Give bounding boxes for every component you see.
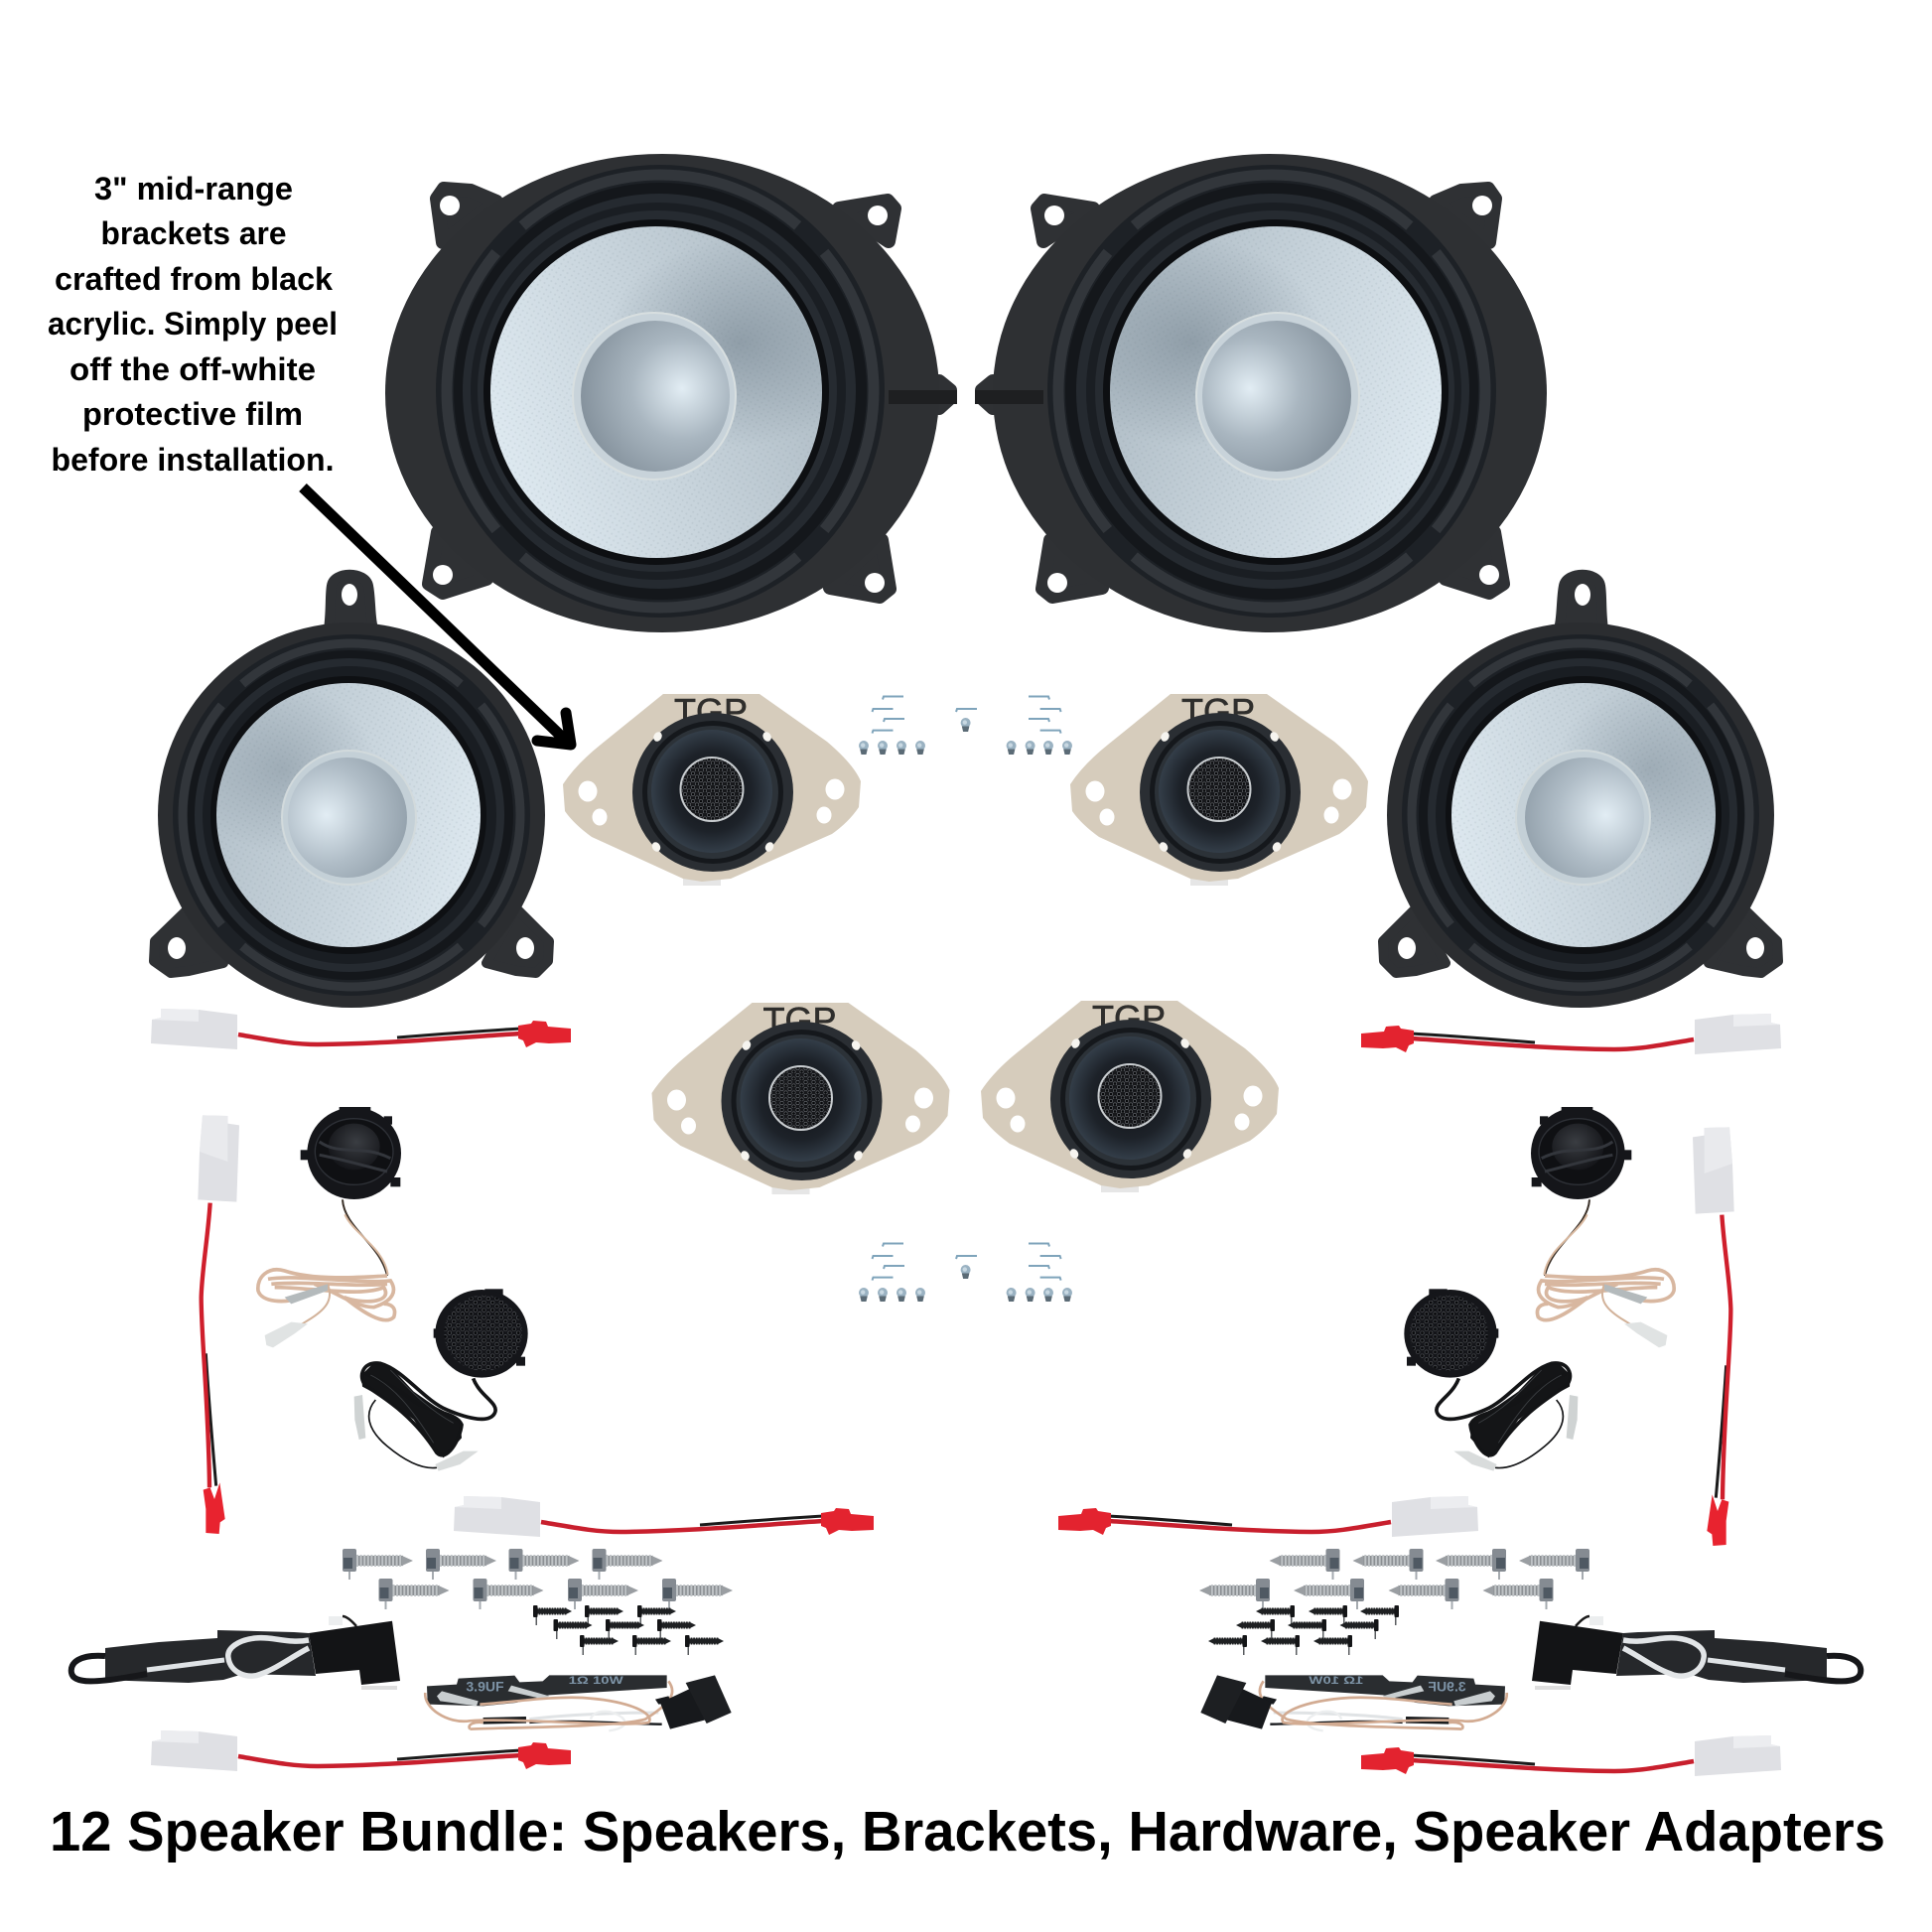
bracket with coaxial speaker 3	[651, 1000, 949, 1194]
arrow	[303, 487, 571, 745]
crossover harness right: 3.9UF	[1428, 1678, 1466, 1694]
crossover harness left	[425, 1675, 732, 1730]
callout text: acrylic. Simply peel	[48, 306, 338, 342]
small speaker right	[1383, 575, 1778, 1008]
callout text: 3" mid-range	[94, 171, 293, 207]
harness lower right	[1361, 1735, 1781, 1776]
plug harness left	[71, 1616, 400, 1690]
vertical harness left	[198, 1115, 239, 1534]
screws right	[1199, 1549, 1589, 1655]
callout text: off the off-white	[69, 351, 316, 387]
harness upper left	[151, 1009, 571, 1049]
harness middle left	[454, 1496, 874, 1537]
large speaker left	[385, 154, 957, 632]
harness upper right	[1361, 1014, 1781, 1054]
bracket with coaxial speaker 2	[1070, 691, 1368, 886]
bracket with coaxial speaker 1: TGP	[674, 691, 748, 732]
mini hardware top	[859, 697, 1072, 755]
callout text: protective film	[82, 396, 303, 432]
large speaker right	[975, 154, 1547, 632]
vertical harness right	[1693, 1127, 1734, 1546]
harness middle right	[1058, 1496, 1478, 1537]
bracket with coaxial speaker 1	[563, 691, 861, 886]
bracket with coaxial speaker 4: TGP	[1092, 998, 1166, 1038]
callout text: brackets are	[101, 215, 286, 251]
tweeter beige wire right	[1531, 1107, 1674, 1347]
callout text	[48, 171, 338, 478]
crossover harness right: 1Ω 10W	[1309, 1675, 1363, 1687]
harness lower left	[151, 1730, 571, 1771]
screws left	[343, 1549, 733, 1655]
bracket with coaxial speaker 4	[981, 998, 1279, 1192]
callout text: crafted from black	[55, 261, 333, 297]
crossover harness left: 3.9UF	[466, 1678, 504, 1694]
title: 12 Speaker Bundle: Speakers, Brackets, Hardware, Speaker Adapters	[50, 1800, 1885, 1863]
tweeter black wire left	[354, 1289, 528, 1471]
bracket with coaxial speaker 3: TGP	[762, 1000, 836, 1040]
plug harness right	[1532, 1616, 1861, 1690]
tweeter beige wire left	[258, 1107, 401, 1347]
crossover harness right	[1200, 1675, 1507, 1730]
tweeter black wire right	[1404, 1289, 1578, 1471]
bracket with coaxial speaker 2: TGP	[1181, 691, 1255, 732]
crossover harness left: 1Ω 10W	[569, 1675, 623, 1687]
small speaker left	[154, 575, 549, 1008]
callout text: before installation.	[52, 442, 334, 478]
mini hardware bottom	[859, 1243, 1072, 1302]
